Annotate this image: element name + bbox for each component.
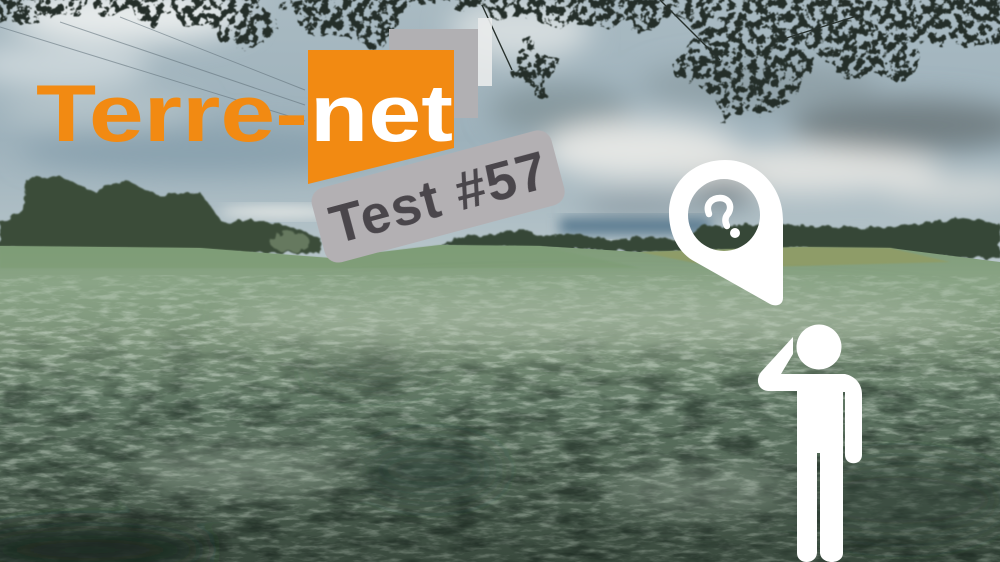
icon: location pin with question mark xyxy=(669,160,783,305)
background: power lines xyxy=(0,17,305,121)
background: overhanging foliage xyxy=(0,0,1000,115)
logo: net wordmark: net xyxy=(310,69,453,159)
branch xyxy=(482,0,860,70)
background: tree line xyxy=(0,176,1000,258)
background: cloudy sky xyxy=(0,0,1000,280)
icon: question mark xyxy=(708,198,740,238)
badge: Test #57: Test #57 xyxy=(324,140,553,256)
logo: orange block xyxy=(308,50,454,184)
icon: person scratching head xyxy=(758,324,862,562)
logo xyxy=(36,18,492,184)
logo: Terre- wordmark: Terre- xyxy=(36,69,308,159)
background: grass field xyxy=(0,245,1000,562)
logo: grey corner shapes xyxy=(389,18,492,118)
